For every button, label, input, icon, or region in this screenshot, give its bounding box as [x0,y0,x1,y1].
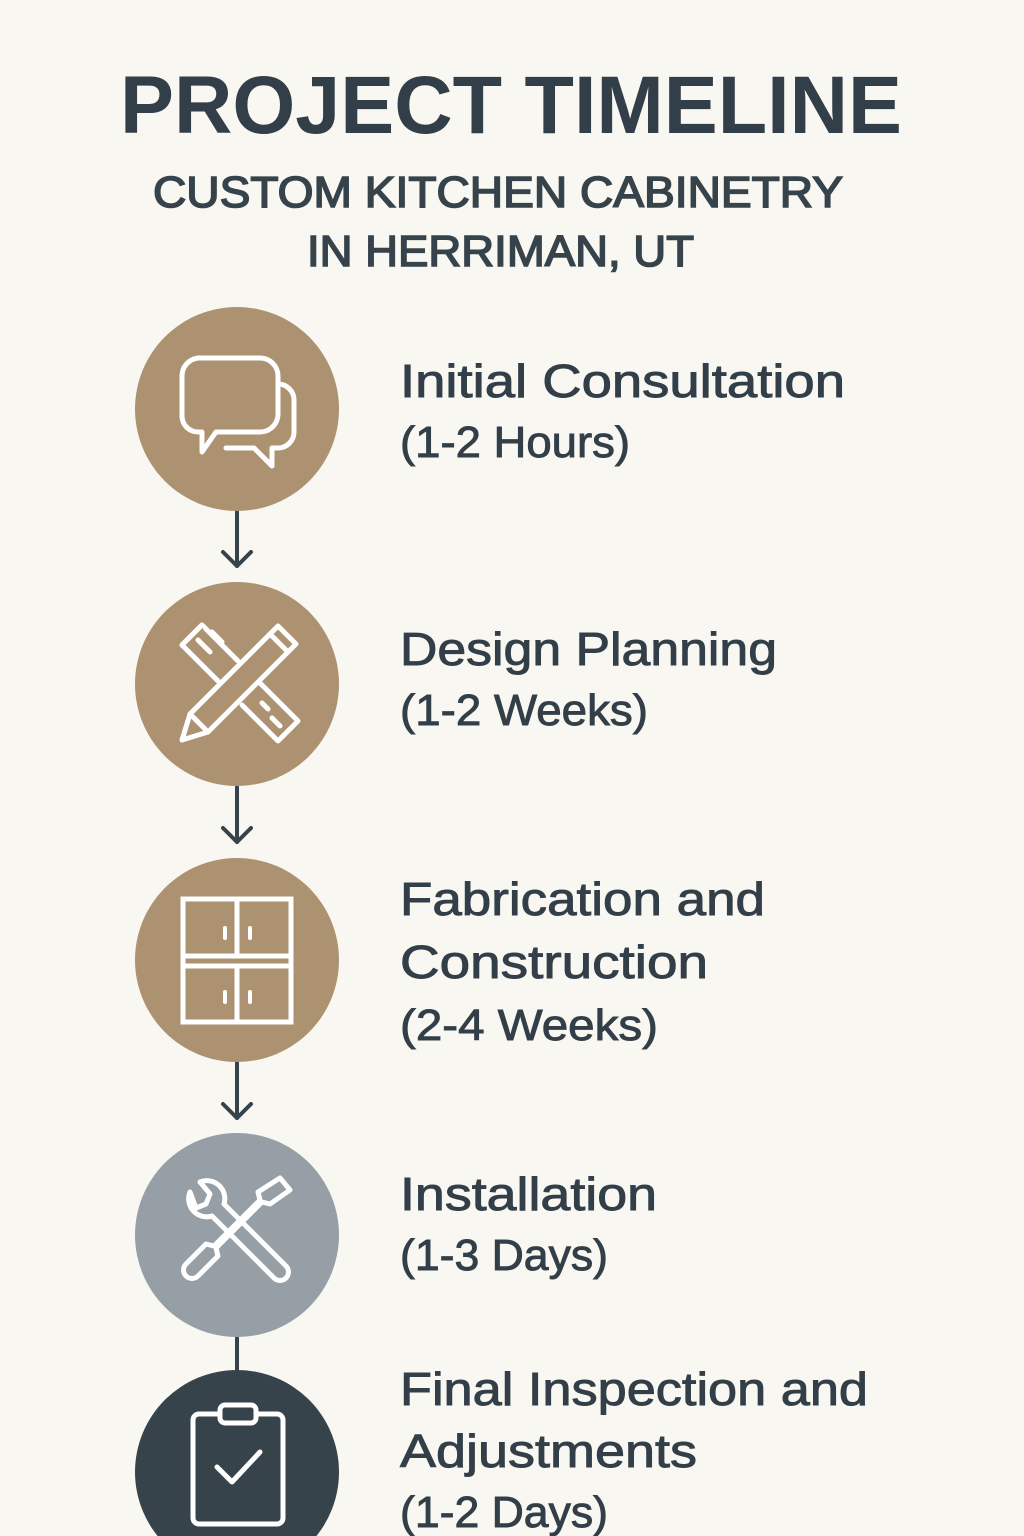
step 4: installation: (1-3 Days) [400,1231,608,1280]
subtitle: IN HERRIMAN, UT [307,227,694,276]
title: PROJECT TIMELINE [120,60,902,151]
step 4: installation [135,1133,657,1337]
subtitle: CUSTOM KITCHEN CABINETRY [153,168,843,217]
step 4: installation: Installation [400,1168,657,1220]
step 5: final inspection [135,1363,868,1536]
step 3: fabrication and construction: (2-4 Weeks) [400,1001,658,1050]
step 1: initial consultation: (1-2 Hours) [400,418,630,467]
icon: ruler and pencil [135,582,339,786]
icon: chat bubbles [135,307,339,511]
step 1: initial consultation [135,307,845,511]
step 2: design planning: (1-2 Weeks) [400,686,648,735]
step 3: fabrication and construction: Construction [400,936,708,988]
step 5: final inspection: (1-2 Days) [400,1488,608,1536]
step 1: initial consultation: Initial Consultation [400,355,845,407]
step 2: design planning: Design Planning [400,623,777,675]
icon: cabinet [135,858,339,1062]
icon: wrench and screwdriver [135,1133,339,1337]
icon: clipboard [135,1370,339,1536]
step 5: final inspection: Adjustments [400,1425,697,1477]
subtitle [153,168,843,276]
step 3: fabrication and construction: Fabrication and [400,873,765,925]
connector arrows [223,512,251,1372]
step 2: design planning [135,582,777,786]
step 3: fabrication and construction [135,858,765,1062]
step 5: final inspection: Final Inspection and [400,1363,868,1415]
